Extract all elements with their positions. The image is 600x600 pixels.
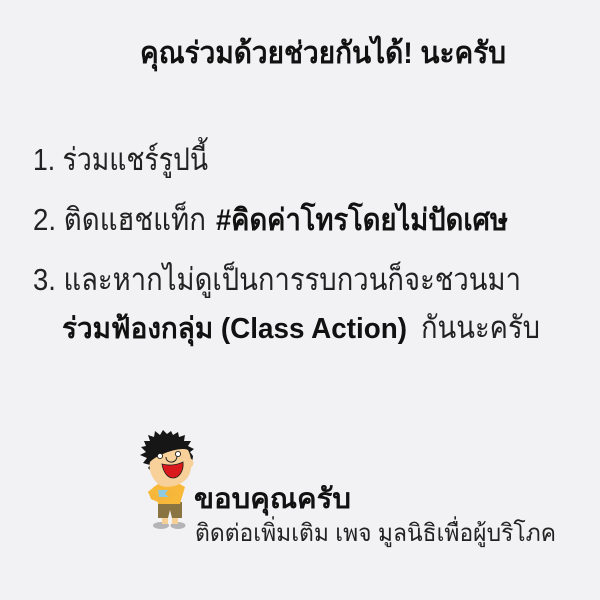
thanks heading: ขอบคุณครับ — [194, 483, 351, 516]
legs — [162, 514, 168, 524]
hair — [140, 430, 194, 472]
step 2 text: 2. ติดแฮชแท็ก — [33, 201, 206, 237]
shoes — [153, 522, 169, 529]
step 3 text: กันนะครับ — [421, 310, 540, 345]
eyes — [157, 453, 163, 459]
step 3 text: ร่วมฟ้องกลุ่ม (Class Action) — [62, 313, 407, 346]
contact text: ติดต่อเพิ่มเติม เพจ มูลนิธิเพื่อผู้บริโภค — [195, 516, 556, 548]
step 1 text: 1. ร่วมแชร์รูปนี้ — [33, 137, 208, 178]
step 2 text — [33, 201, 508, 237]
step 2 text: #คิดค่าโทรโดยไม่ปัดเศษ — [216, 201, 508, 237]
title: คุณร่วมด้วยช่วยกันได้! นะครับ — [140, 35, 506, 72]
shorts — [158, 502, 182, 518]
shirt stripe — [158, 490, 169, 497]
shirt — [148, 483, 185, 504]
step 3 text — [33, 261, 540, 346]
nose — [166, 456, 177, 462]
ear — [186, 458, 194, 468]
head — [149, 449, 191, 487]
arm — [148, 488, 177, 503]
mouth — [162, 462, 183, 478]
step 3 text: 3. และหากไม่ดูเป็นการรบกวนก็จะชวนมา — [33, 261, 521, 298]
icon: cartoon mascot — [140, 430, 194, 529]
